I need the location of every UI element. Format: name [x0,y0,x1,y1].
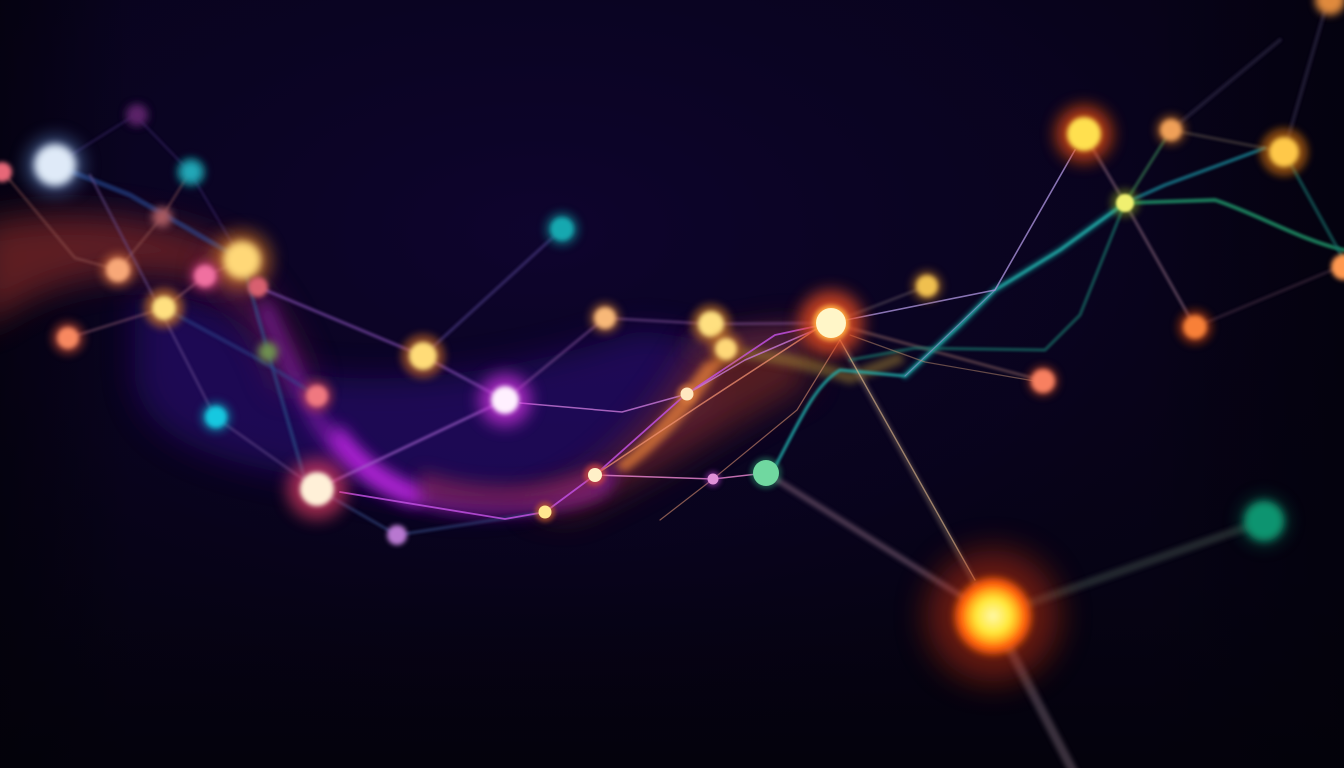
dim indigo haze [135,296,720,504]
node: pink dim [248,277,268,297]
node: orange [51,321,85,355]
node: green blurred [1238,495,1290,547]
node: peach [1155,114,1187,146]
node: large orange foreground [927,550,1059,682]
node: yellow small [709,332,743,366]
node: teal small [176,157,206,187]
node: pink [189,260,221,292]
node: amber large [212,230,272,290]
node: dim peach [152,207,172,227]
node: green [750,457,782,489]
node: peach [589,302,621,334]
foreground blurred connections to big orange node [766,340,1264,768]
node: peach [100,252,136,288]
node: amber [1260,128,1308,176]
node: tiny sharp [535,502,555,522]
orange stream [615,358,725,472]
node: yellow [401,334,445,378]
node: orange [1177,309,1213,345]
node: tiny sharp [584,464,606,486]
node: magenta-white [479,374,531,426]
purple stream [258,300,620,514]
node: tiny yellow junction [1111,189,1139,217]
red-brown left band [0,215,235,330]
node: yellow [691,304,731,344]
node: olive dim [258,342,278,362]
maroon glow right of ribbon [520,325,810,515]
nodes: right cluster [927,0,1344,682]
node: central glowing [799,291,863,355]
teal glow [905,203,1125,376]
nodes: middle cluster [401,211,1059,522]
sharp coloured lines [340,148,1344,580]
node: orange right edge [1331,254,1344,280]
node: amber [911,270,943,302]
node: tiny lilac [705,471,721,487]
node: white-blue [25,135,85,195]
node: yellow [144,288,184,328]
background blurred connections [3,10,1344,535]
node: tiny sharp [677,384,697,404]
node: orange top edge [1315,0,1344,15]
node: teal [544,211,580,247]
node: pink edge [0,162,12,182]
flowing ribbon [0,215,905,515]
node: cyan [200,401,232,433]
node: lilac [387,525,407,545]
node: yellow-orange [1056,106,1112,162]
node: orange-red [1027,365,1059,397]
node: dim purple [126,104,148,126]
node: coral [300,379,334,413]
node: white-pink large [287,459,347,519]
nodes: left cluster [0,104,407,545]
